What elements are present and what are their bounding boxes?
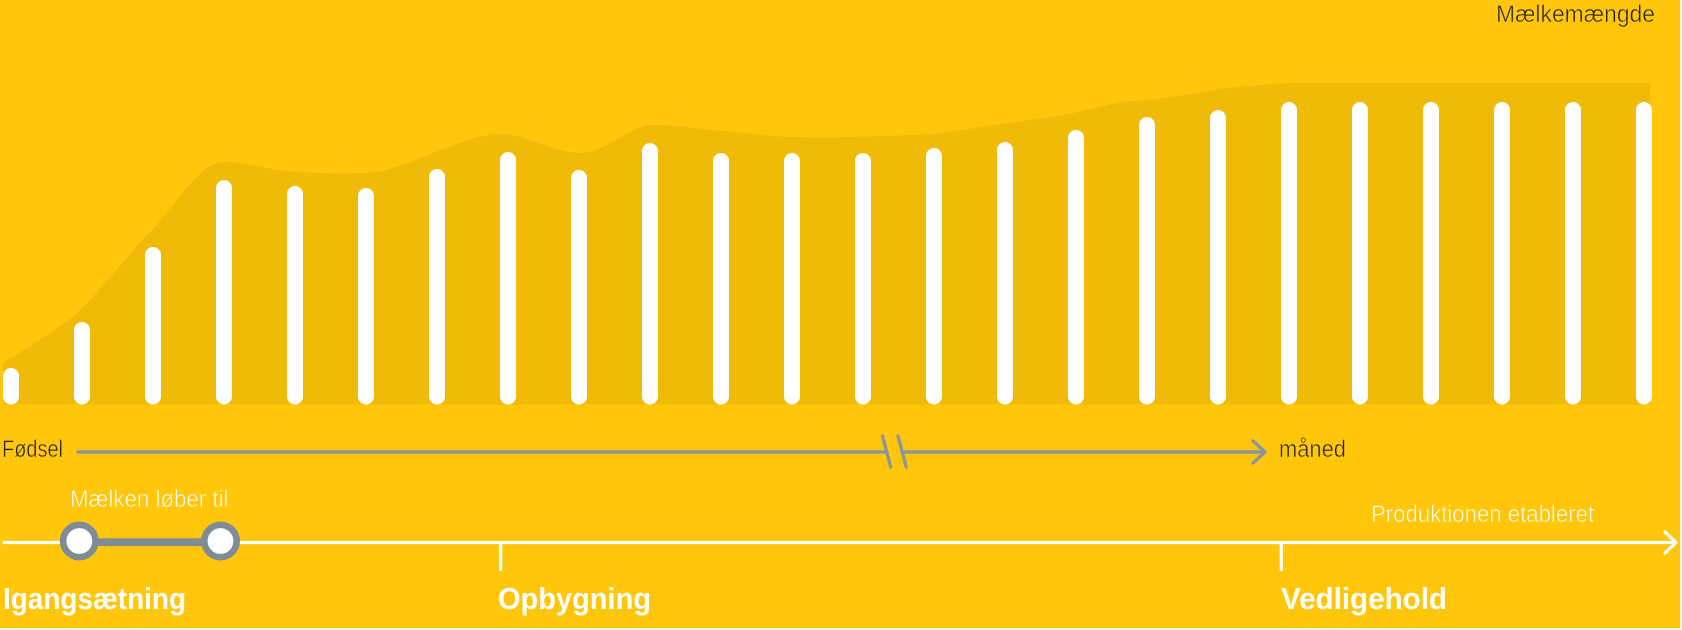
phase heading: Igangsætning: Igangsætning [3,581,186,616]
milk let-down marker: two circles joined by a bar [63,525,237,557]
bar chart: milk volume by period [3,102,1652,404]
area: milk volume curve [3,83,1650,404]
axis label: Mælkemængde: Mælkemængde [1496,1,1655,28]
phase heading: Opbygning: Opbygning [498,581,651,616]
phase heading: Vedligehold: Vedligehold [1281,581,1447,616]
axis label: Fødsel: Fødsel [2,436,63,463]
label: Mælken løber til: Mælken løber til [70,486,228,513]
phase timeline arrow with ticks [4,532,1676,571]
time arrow with axis break [78,436,1265,467]
axis label: måned: måned [1279,436,1346,463]
label: Produktionen etableret: Produktionen etableret [1371,501,1594,528]
